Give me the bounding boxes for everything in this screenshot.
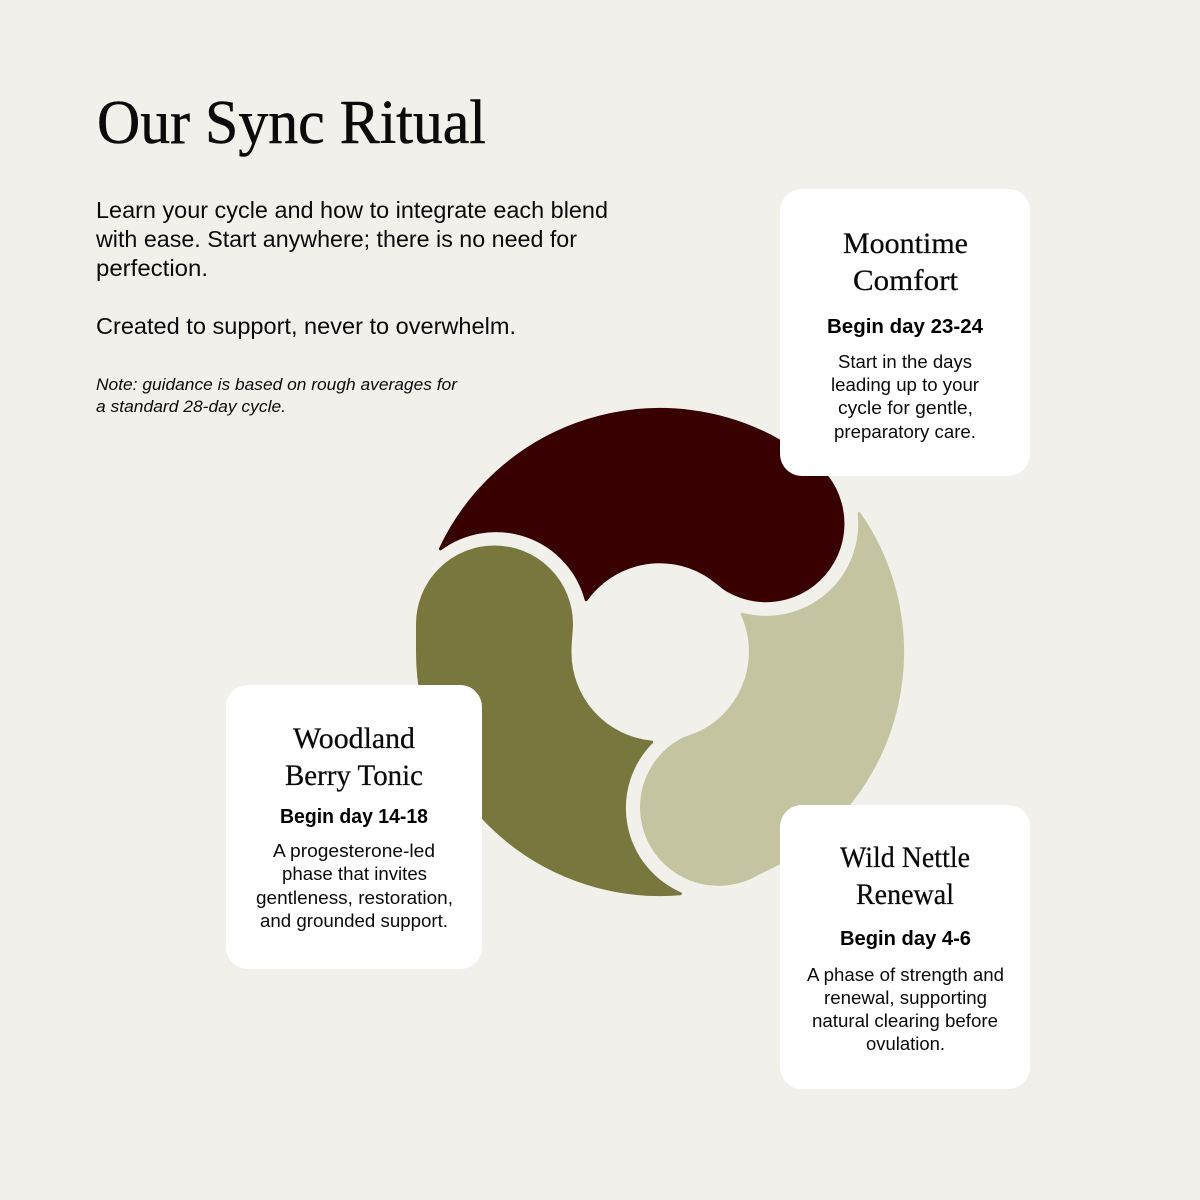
description: renewal, supporting — [824, 988, 987, 1008]
description: gentleness, restoration, — [256, 888, 453, 908]
description: A phase of strength and — [807, 965, 1004, 985]
card heading: Renewal — [856, 878, 954, 911]
card heading — [840, 841, 970, 911]
description — [807, 965, 1004, 1054]
begin day: Begin day 4-6 — [840, 928, 971, 950]
description: A progesterone-led — [273, 841, 435, 861]
description: preparatory care. — [834, 422, 976, 442]
card heading: Woodland — [293, 722, 415, 755]
description — [831, 352, 979, 442]
intro text: perfection. — [96, 255, 208, 281]
description: phase that invites — [282, 864, 427, 884]
description: leading up to your — [831, 375, 979, 395]
card heading: Comfort — [853, 264, 959, 297]
card heading — [285, 722, 423, 792]
intro text: Created to support, never to overwhelm. — [96, 313, 516, 339]
intro text: with ease. Start anywhere; there is no need for — [95, 226, 577, 252]
description: and grounded support. — [260, 911, 448, 931]
card: Moontime Comfort — [780, 189, 1030, 476]
segment: Wild Nettle Renewal — [560, 513, 991, 914]
intro text — [95, 197, 608, 339]
description: cycle for gentle, — [838, 398, 973, 418]
title: Our Sync Ritual — [97, 89, 486, 157]
note: a standard 28-day cycle. — [96, 397, 286, 416]
note — [96, 375, 458, 416]
description: Start in the days — [838, 352, 972, 372]
intro text: Learn your cycle and how to integrate each blend — [96, 197, 608, 223]
description: natural clearing before — [812, 1011, 998, 1031]
begin day: Begin day 23-24 — [827, 316, 984, 338]
card heading: Wild Nettle — [840, 841, 970, 874]
card: Wild Nettle Renewal — [780, 805, 1030, 1089]
segment: Moontime Comfort — [440, 321, 872, 722]
description — [256, 841, 453, 931]
card heading: Berry Tonic — [285, 759, 423, 792]
card heading — [843, 227, 968, 297]
card: Woodland Berry Tonic — [226, 685, 482, 969]
description: ovulation. — [866, 1034, 945, 1054]
note: Note: guidance is based on rough averages for — [96, 375, 458, 394]
begin day: Begin day 14-18 — [280, 806, 428, 828]
cycle diagram — [418, 321, 991, 914]
segment: Woodland Berry Tonic — [418, 547, 680, 895]
card heading: Moontime — [843, 227, 968, 260]
